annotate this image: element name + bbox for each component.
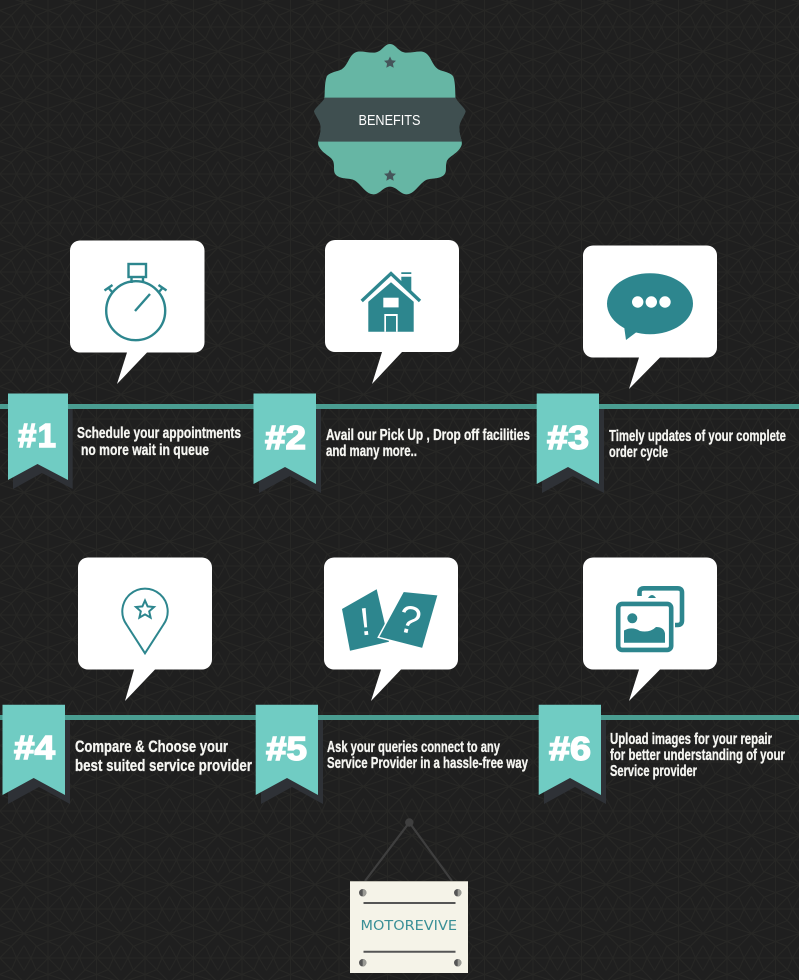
sign rope bbox=[365, 822, 452, 881]
text 2 bbox=[326, 427, 530, 460]
icon: stopwatch bbox=[104, 264, 166, 340]
text 4: Compare & Choose your bbox=[75, 737, 228, 756]
text 2: Avail our Pick Up , Drop off facilities bbox=[326, 427, 530, 444]
star: bottom bbox=[384, 170, 396, 181]
sign text: MOTOREVIVE bbox=[360, 918, 457, 934]
text 6: Service provider bbox=[610, 763, 697, 780]
connector line: row 1 bbox=[0, 404, 799, 409]
ribbon 5 shadow bbox=[261, 720, 323, 804]
badge title: BENEFITS bbox=[358, 113, 420, 129]
text 5 bbox=[327, 739, 528, 772]
item 6 bbox=[539, 558, 785, 804]
ribbon 6 shadow bbox=[544, 720, 606, 804]
number 5: #5 bbox=[266, 730, 307, 767]
ribbon 3 shadow bbox=[542, 409, 604, 493]
ribbon 4 shadow bbox=[8, 720, 70, 804]
ribbon 2 bbox=[254, 394, 316, 484]
number 2: #2 bbox=[265, 419, 306, 456]
text 1: no more wait in queue bbox=[81, 442, 209, 459]
speech bubble 4 bbox=[78, 558, 212, 701]
icon: chat bubble bbox=[607, 273, 693, 340]
number 1: #1 bbox=[18, 417, 56, 454]
item 4 bbox=[2, 558, 252, 804]
speech bubble 1 bbox=[70, 240, 204, 384]
icon: question and exclamation papers: ! bbox=[358, 601, 373, 644]
number 6: #6 bbox=[549, 730, 591, 767]
text 1 bbox=[77, 425, 241, 459]
speech bubble 2 bbox=[325, 240, 459, 384]
item 5 bbox=[256, 558, 528, 804]
icon: house bbox=[362, 272, 420, 332]
text 3 bbox=[609, 428, 786, 461]
hanging sign: motorevive bbox=[350, 818, 468, 973]
item 3 bbox=[537, 246, 786, 493]
sign lines bbox=[364, 903, 456, 952]
sign bolts bbox=[359, 889, 461, 966]
speech bubble 5 bbox=[324, 558, 458, 701]
ribbon 4 bbox=[2, 705, 65, 795]
icon: map pin with star bbox=[122, 589, 168, 653]
icon: image gallery bbox=[618, 588, 682, 650]
connector line: row 2 bbox=[0, 715, 799, 720]
ribbon 5 bbox=[256, 705, 318, 795]
text 4 bbox=[75, 737, 252, 775]
text 4: best suited service provider bbox=[75, 756, 252, 775]
star: top bbox=[384, 56, 396, 68]
icon: question and exclamation papers: ? bbox=[394, 597, 425, 644]
text 1: Schedule your appointments bbox=[77, 425, 241, 442]
item 1 bbox=[8, 240, 241, 489]
ribbon 3 bbox=[537, 394, 599, 484]
text 5: Service Provider in a hassle-free way bbox=[327, 755, 528, 772]
ribbon 1 bbox=[8, 394, 68, 480]
item 2 bbox=[254, 240, 530, 493]
ribbon 6 bbox=[539, 705, 601, 795]
icon: question and exclamation papers bbox=[342, 589, 438, 651]
text 5: Ask your queries connect to any bbox=[327, 739, 500, 756]
band bbox=[314, 98, 466, 142]
badge: benefits bbox=[314, 44, 466, 194]
text 6 bbox=[610, 731, 785, 780]
ribbon 2 shadow bbox=[259, 409, 321, 493]
ribbon 1 shadow bbox=[13, 409, 73, 489]
speech bubble 3 bbox=[583, 246, 717, 389]
number 4: #4 bbox=[14, 729, 56, 766]
speech bubble 6 bbox=[583, 558, 717, 701]
sign board bbox=[350, 881, 468, 973]
number 3: #3 bbox=[547, 419, 589, 456]
text 2: and many more.. bbox=[326, 443, 417, 460]
text 3: order cycle bbox=[609, 444, 668, 461]
sign knob bbox=[405, 818, 413, 827]
